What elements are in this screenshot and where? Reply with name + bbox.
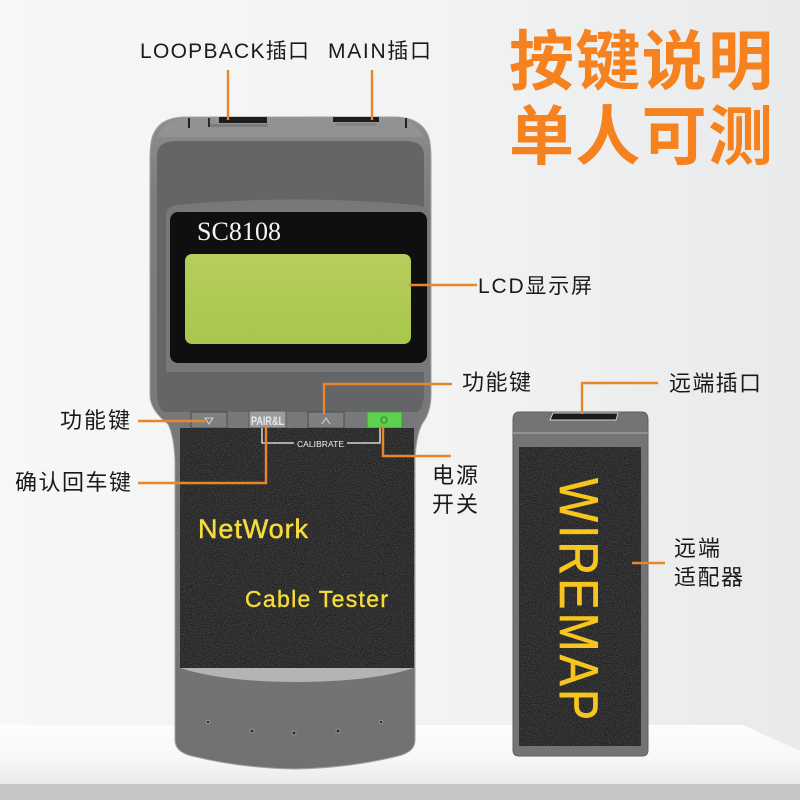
button: down (191, 412, 227, 428)
label: enter key: 确认回车键 (15, 470, 131, 495)
panel name text: Cable Tester (245, 586, 388, 612)
lower curved trim (180, 668, 414, 682)
adapter port (550, 413, 618, 420)
label: remote port: 远端插口 (669, 371, 761, 396)
button: PAIR (249, 411, 286, 428)
label: LCD: LCD显示屏 (478, 275, 592, 298)
button: power (367, 412, 402, 428)
side ticks (188, 118, 407, 128)
leader lines (138, 70, 665, 563)
label: power switch: 开关 (432, 492, 478, 517)
calibrate bracket: CALIBRATE (297, 439, 344, 449)
label: remote adapter: 远端 (674, 536, 720, 561)
port band (157, 118, 424, 137)
remote adapter (513, 412, 648, 756)
button: up (308, 412, 344, 428)
calibrate bracket (262, 428, 380, 449)
model number: SC8108 (197, 217, 281, 246)
label: power switch (432, 463, 478, 517)
panel name text (198, 514, 388, 612)
panel name text: NetWork (198, 514, 308, 544)
label: function key right: 功能键 (462, 370, 531, 395)
label: loopback port: LOOPBACK插口 (140, 40, 309, 63)
label: main port: MAIN插口 (328, 40, 431, 63)
LOOPBACK port (208, 117, 268, 127)
title (509, 25, 773, 173)
device body (150, 117, 431, 769)
label: function key left: 功能键 (60, 408, 130, 433)
LCD bezel (166, 200, 430, 372)
title: 按键说明 (509, 25, 773, 98)
MAIN port (333, 117, 379, 126)
button: PAIR: PAIR&L (251, 414, 284, 428)
label: power switch: 电源 (432, 463, 478, 488)
title: 单人可测 (509, 100, 773, 173)
label: remote adapter: 适配器 (674, 565, 743, 590)
bottom holes (206, 720, 383, 735)
adapter body (513, 412, 648, 756)
tester device (150, 117, 431, 769)
adapter panel (519, 447, 641, 746)
front panel (180, 428, 414, 668)
WIREMAP text: WIREMAP (548, 478, 610, 720)
face (157, 141, 424, 412)
LCD screen (185, 254, 411, 344)
callout labels (15, 40, 761, 590)
label: remote adapter (674, 536, 743, 590)
